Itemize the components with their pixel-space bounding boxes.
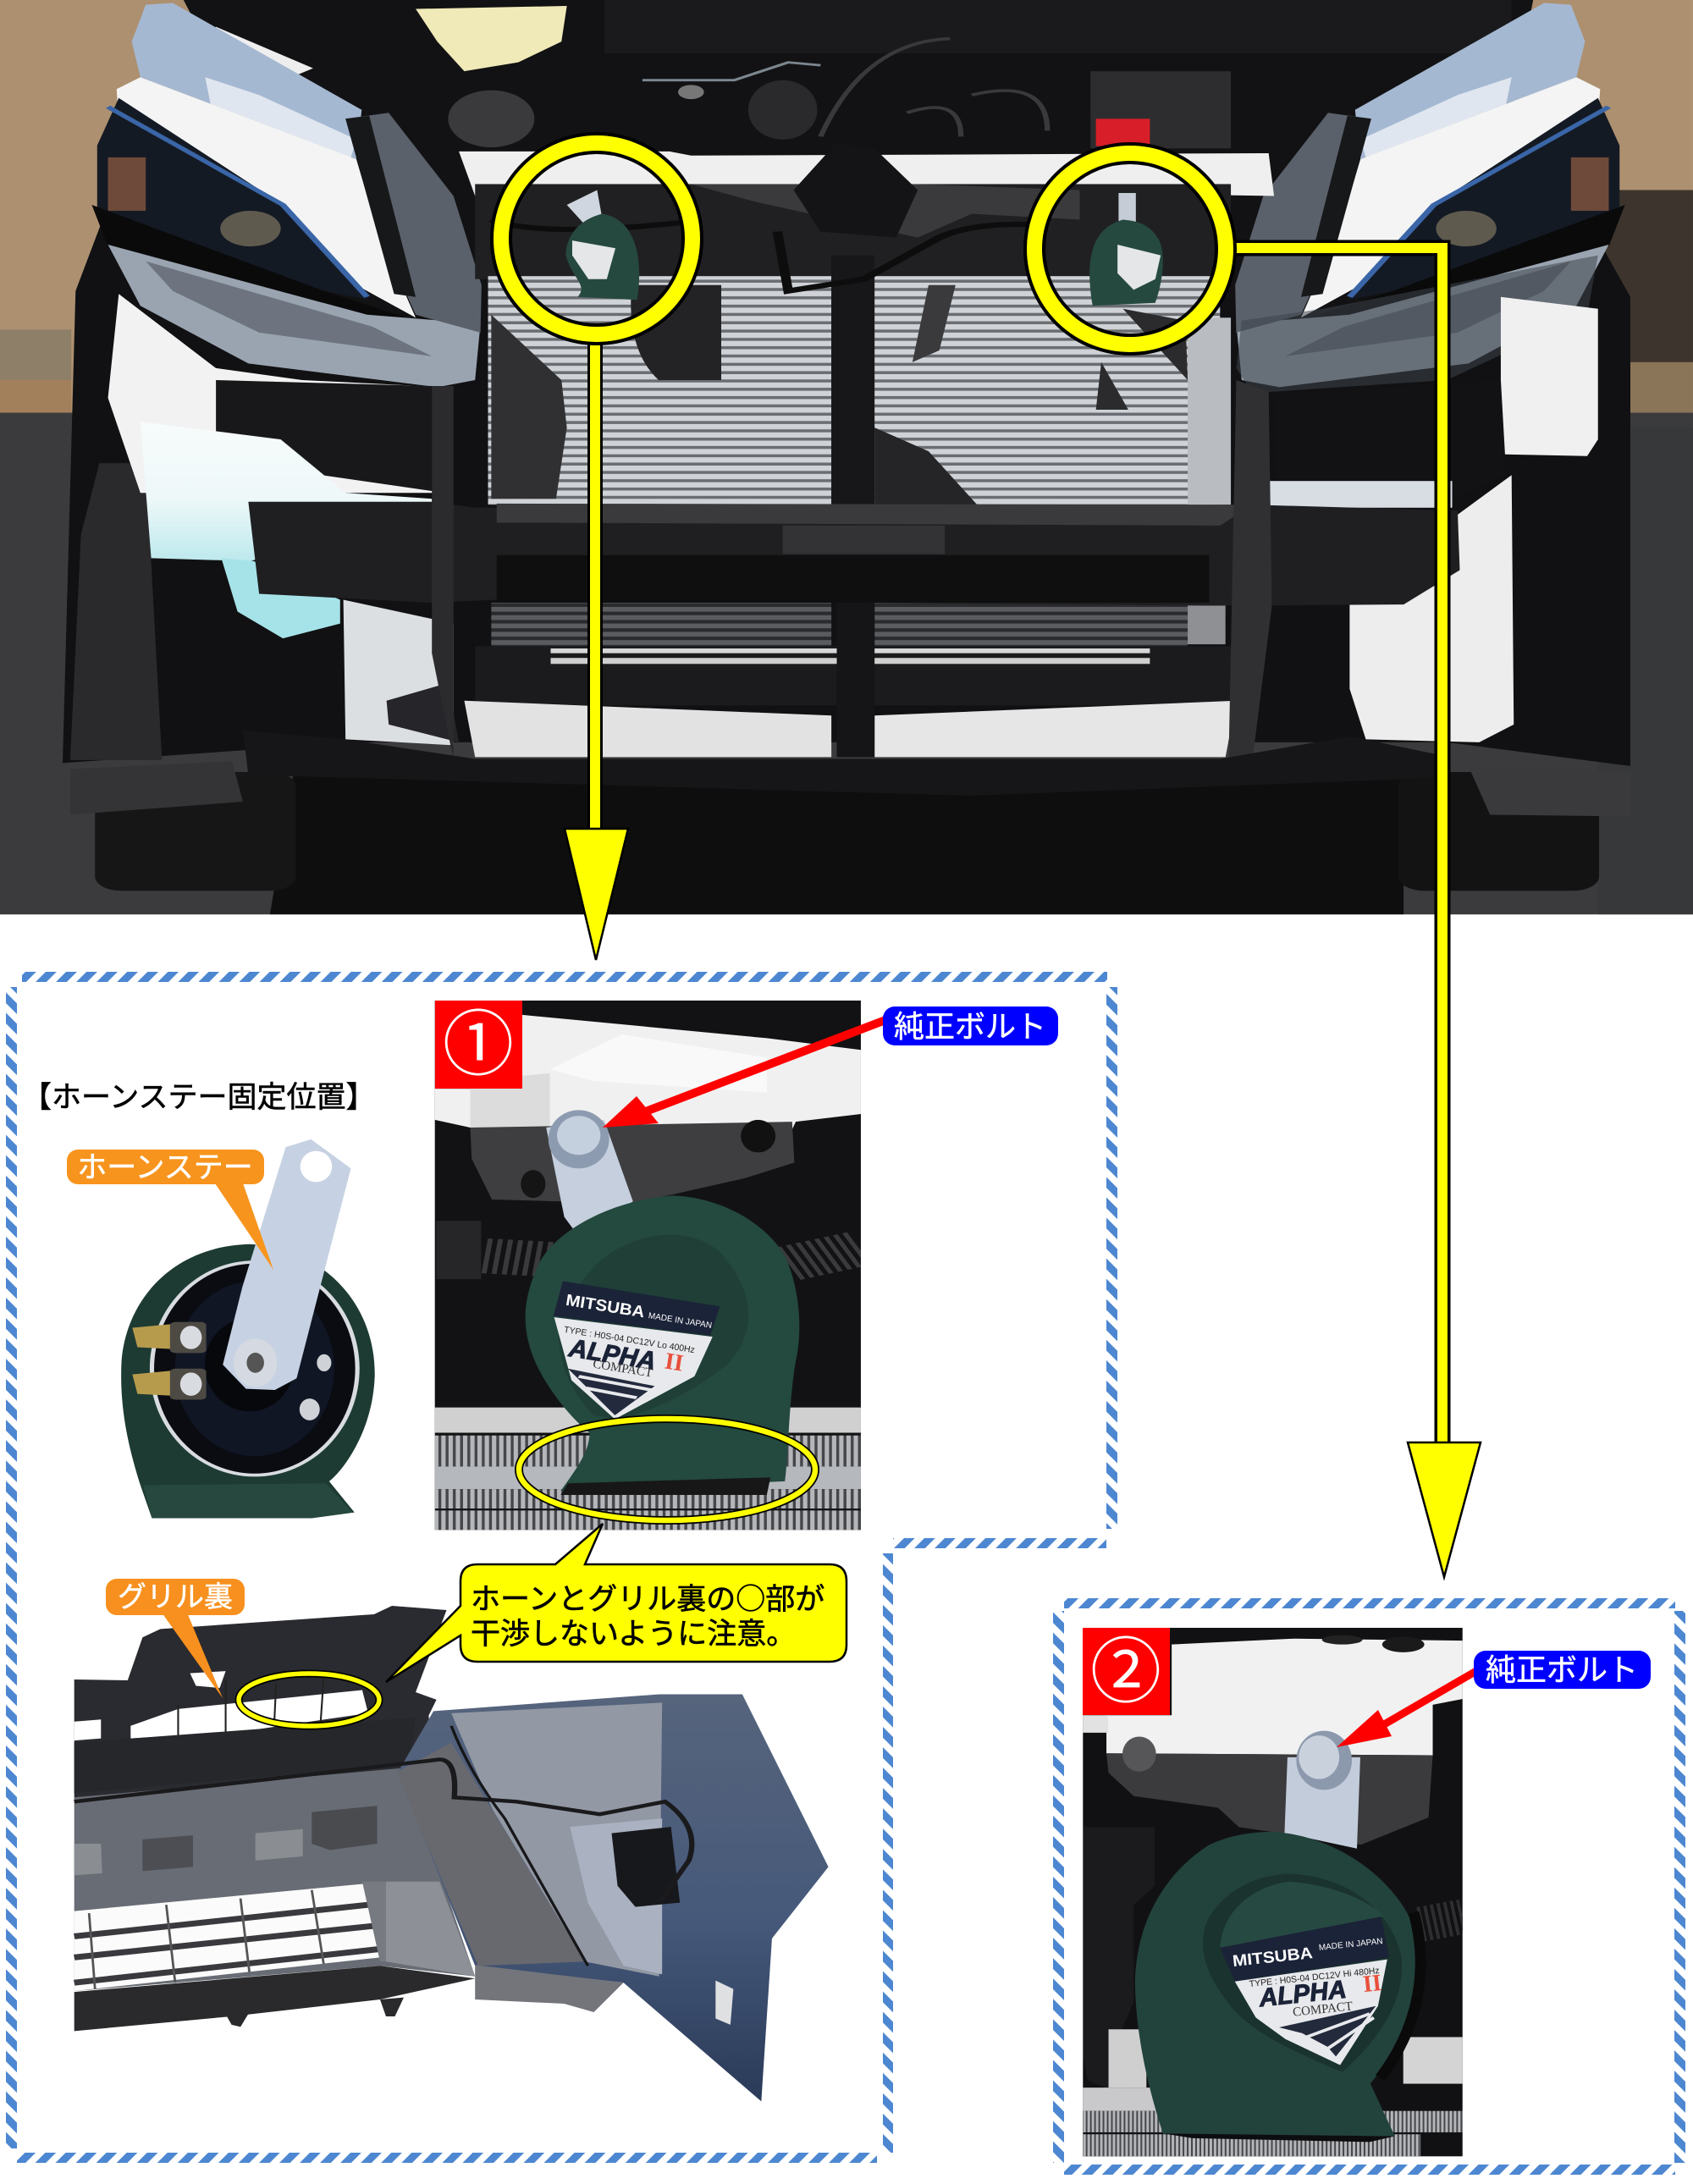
label: horn stay: ホーンステー bbox=[77, 1151, 253, 1184]
photo 1 horn label text: MADE IN JAPAN bbox=[648, 1311, 713, 1331]
label: grille back bbox=[106, 1579, 245, 1698]
photo 2: right horn installed bbox=[1083, 1615, 1651, 2156]
photo 1 horn label text: TYPE : H0S-04 DC12V Lo 400Hz bbox=[563, 1325, 696, 1355]
label: stock bolt 1: 純正ボルト bbox=[894, 1009, 1046, 1044]
radiator support bbox=[459, 152, 1274, 196]
photo 2 horn label text bbox=[1232, 1937, 1383, 2020]
photo 1 horn label text: MITSUBA bbox=[565, 1292, 646, 1321]
photo 1: left horn installed bbox=[435, 988, 1058, 1530]
badge 1: ① bbox=[443, 988, 514, 1090]
photo 2 horn label text: TYPE : H0S-04 DC12V Hi 480Hz bbox=[1249, 1966, 1380, 1989]
photo 2 horn label text: COMPACT bbox=[1292, 1999, 1354, 2020]
yellow circle: right horn bbox=[1034, 153, 1226, 345]
callout: avoid interference note: 干渉しないように注意。 bbox=[471, 1618, 796, 1651]
callout: avoid interference note: ホーンとグリル裏の○部が bbox=[471, 1575, 824, 1619]
badge 2: ② bbox=[1090, 1615, 1161, 1718]
photo 2 horn label text: MITSUBA bbox=[1232, 1944, 1314, 1971]
panel 2 dashed border bbox=[1053, 1598, 1685, 2175]
heading: horn stay fixing position: 【ホーンステー固定位置】 bbox=[22, 1081, 376, 1114]
label: horn stay bbox=[67, 1150, 273, 1270]
photo: bumper rear with grille bbox=[74, 1606, 829, 2101]
lower lip and tow tabs bbox=[245, 739, 1434, 796]
red arrow to stock bolt 2 bbox=[1337, 1671, 1476, 1747]
yellow arrow 1: left horn to panel 1 bbox=[565, 339, 628, 960]
right headlight bbox=[1235, 3, 1625, 387]
ellipse: interference area on grille bbox=[239, 1674, 379, 1726]
label: stock bolt 2: 純正ボルト bbox=[1486, 1652, 1638, 1687]
ellipse: interference area on horn bbox=[519, 1419, 815, 1520]
left side engine parts bbox=[108, 294, 443, 493]
photo 2 horn label text: II bbox=[1362, 1970, 1383, 1998]
photo 1 horn label text: ALPHA bbox=[566, 1334, 658, 1376]
small horns in circles bbox=[567, 190, 603, 223]
photo 1 horn label text: COMPACT bbox=[592, 1358, 653, 1381]
bumper beam bbox=[248, 502, 1459, 606]
photo 1 horn label text: II bbox=[663, 1348, 686, 1377]
photo 1 horn label text bbox=[563, 1292, 713, 1381]
left headlight bbox=[91, 3, 482, 387]
photo 2 horn label text: MADE IN JAPAN bbox=[1318, 1937, 1383, 1953]
lower white panel bbox=[464, 701, 831, 757]
lower radiator bbox=[491, 603, 831, 648]
callout: avoid interference note bbox=[386, 1524, 846, 1682]
radiator upper bbox=[488, 276, 1231, 505]
right side parts bbox=[1501, 297, 1598, 456]
label: grille back: グリル裏 bbox=[118, 1581, 233, 1613]
photo 2 horn label text: ALPHA bbox=[1257, 1976, 1348, 2012]
yellow circle: left horn bbox=[501, 143, 692, 334]
photo: horn with stay bbox=[121, 1139, 375, 1519]
panel 1 dashed border bbox=[6, 972, 1117, 2163]
photo: car front with bumper removed bbox=[0, 0, 1693, 918]
yellow arrow 2: right horn to panel 2 bbox=[1233, 248, 1481, 1577]
red arrow to stock bolt 1 bbox=[603, 1020, 885, 1128]
